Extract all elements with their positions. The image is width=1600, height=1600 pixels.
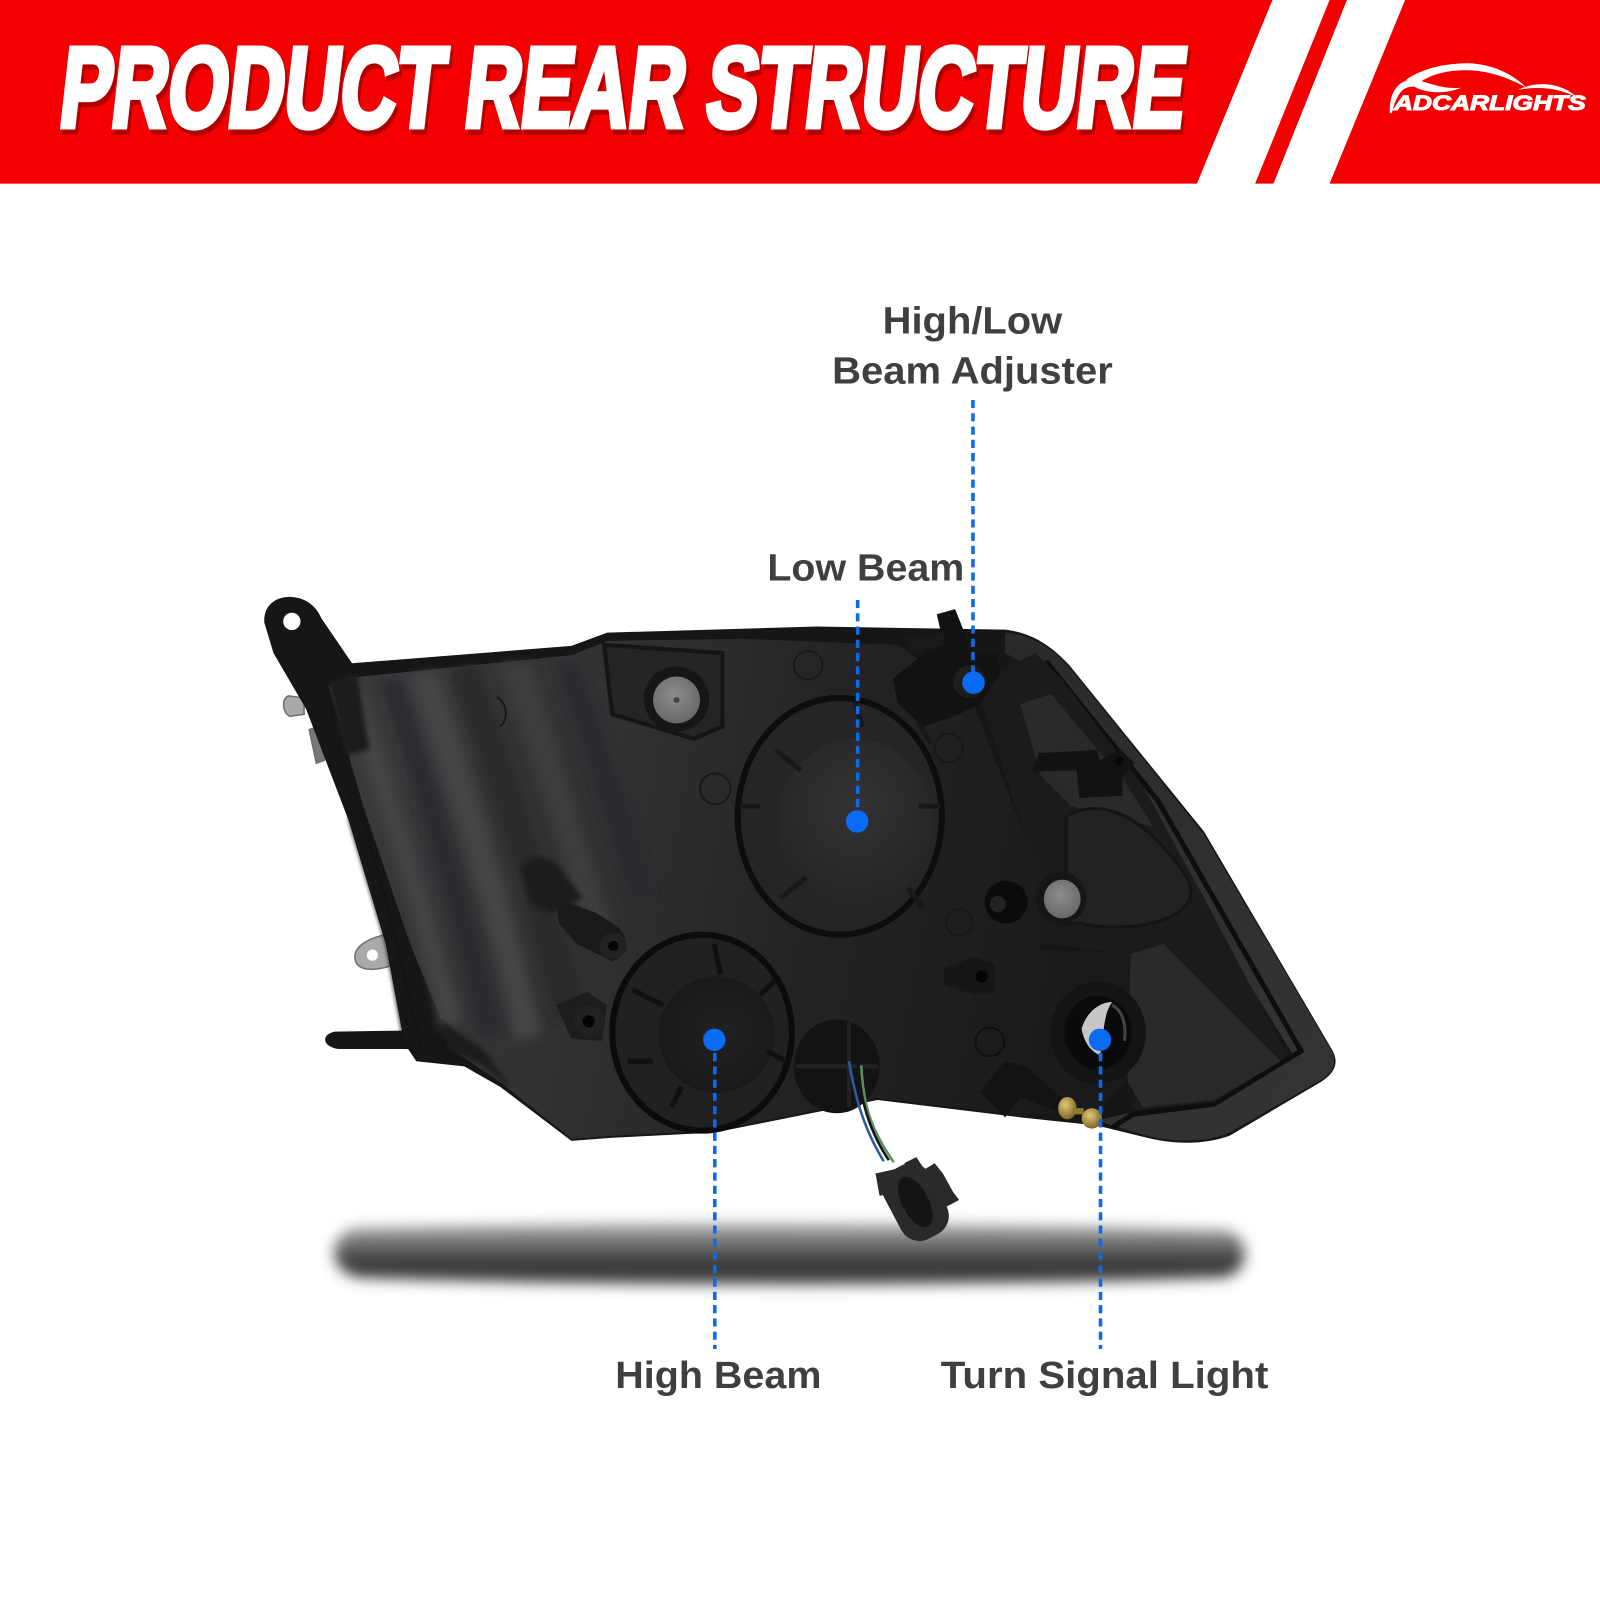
- lower adjuster screw: [980, 1061, 1102, 1129]
- side studs: [520, 857, 627, 1041]
- housing silhouette: [264, 597, 1336, 1143]
- round hole: [985, 881, 1028, 923]
- plug pocket with vent cap: [604, 645, 722, 739]
- lower stud: [944, 957, 995, 995]
- connector socket: [794, 1019, 880, 1113]
- callout: High Beam: High Beam: [615, 1354, 821, 1396]
- callout: Low Beam: Low Beam: [767, 547, 964, 589]
- wire harness: [849, 1061, 894, 1162]
- headlight rear housing: [264, 597, 1336, 1248]
- moulded marks: [497, 651, 972, 936]
- logo: Adcarlights: ADCARLIGHTS: [1393, 91, 1587, 115]
- callout: High/Low Beam Adjuster: High/Low: [883, 300, 1063, 342]
- callout: High Beam: [615, 1029, 821, 1396]
- small moulded pad: [976, 1028, 1004, 1056]
- right vent cap: [1036, 872, 1087, 923]
- ground shadow: [334, 1223, 1245, 1284]
- top adjuster gear: [893, 609, 1000, 727]
- turn signal socket: [1050, 982, 1146, 1084]
- callout: Turn Signal Light: [941, 1029, 1269, 1396]
- wiring connector: [875, 1156, 959, 1248]
- ribs on left side: [339, 661, 653, 1041]
- callout: High/Low Beam Adjuster: [832, 300, 1113, 694]
- upper right bracket: [1033, 749, 1135, 798]
- right inner dark block: [974, 653, 1288, 1110]
- callout: Low Beam: [767, 547, 964, 833]
- right lens frame: [1005, 633, 1334, 1141]
- silver mounting bolts: [284, 696, 410, 1024]
- main body panel: [329, 639, 1138, 1139]
- callout: High/Low Beam Adjuster: Beam Adjuster: [832, 350, 1113, 392]
- low beam cover: [735, 695, 945, 938]
- logo: Adcarlights: [1390, 63, 1587, 115]
- header banner: [0, 0, 1600, 184]
- high beam cover: [609, 932, 795, 1134]
- callout: Turn Signal Light: Turn Signal Light: [941, 1354, 1269, 1396]
